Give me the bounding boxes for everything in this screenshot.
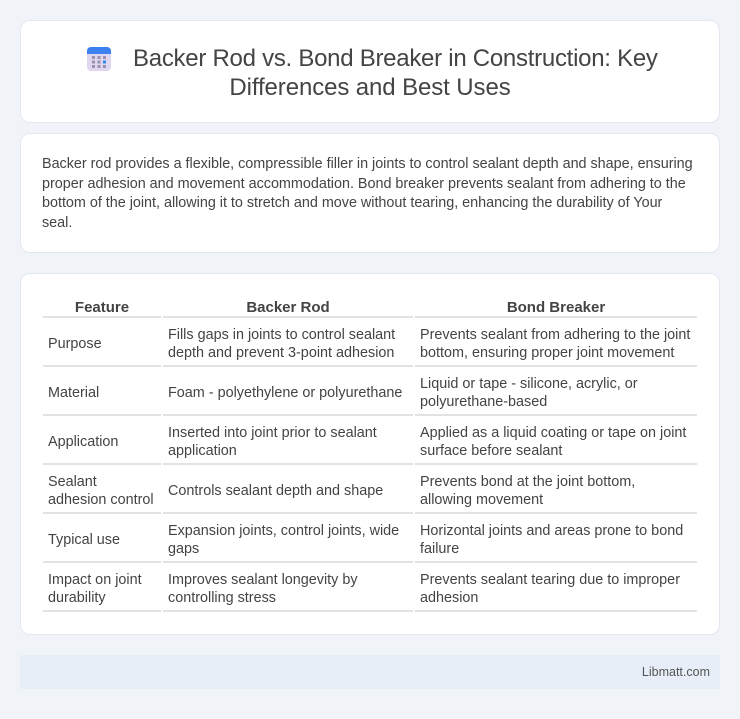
text block: introduction: bottom of the joint, allowing it to stretch and move without tearing, enhancing the durability of Your [42, 195, 662, 211]
comparison table: durability [48, 590, 106, 606]
text block: introduction: Backer rod provides a flexible, compressible filler in joints to control sealant depth and shape, ensuring [42, 156, 693, 172]
comparison table: Prevents sealant tearing due to improper [420, 572, 680, 588]
panel: introduction [20, 133, 720, 253]
comparison table: gaps [168, 540, 199, 556]
comparison table: bottom, ensuring proper joint movement [420, 344, 674, 360]
comparison table: Foam - polyethylene or polyurethane [168, 384, 402, 400]
comparison table: Sealant [48, 474, 97, 490]
comparison table: Controls sealant depth and shape [168, 482, 383, 498]
text block: introduction [42, 156, 693, 230]
comparison table: Improves sealant longevity by [168, 572, 358, 588]
comparison table: Prevents bond at the joint bottom, [420, 474, 635, 490]
footer credit: Libmatt.com [642, 665, 710, 679]
panel: comparison table [20, 273, 720, 635]
comparison table: Application [48, 434, 118, 450]
comparison table: Expansion joints, control joints, wide [168, 522, 399, 538]
comparison table: Bond Breaker [507, 299, 605, 316]
comparison table: Fills gaps in joints to control sealant [168, 326, 395, 342]
comparison table: allowing movement [420, 492, 543, 508]
panel: title card [20, 20, 720, 123]
comparison table: Typical use [48, 532, 120, 548]
comparison table: Liquid or tape - silicone, acrylic, or [420, 376, 638, 392]
comparison table: Applied as a liquid coating or tape on joint [420, 424, 686, 440]
text block: introduction: seal. [42, 214, 72, 230]
title [133, 45, 658, 101]
comparison table: Prevents sealant from adhering to the joint [420, 326, 690, 342]
comparison table: controlling stress [168, 590, 276, 606]
comparison table: polyurethane-based [420, 394, 547, 410]
comparison table: adhesion [420, 590, 478, 606]
title: Differences and Best Uses [229, 74, 511, 101]
comparison table: Impact on joint [48, 572, 142, 588]
comparison table: application [168, 442, 237, 458]
title: Backer Rod vs. Bond Breaker in Construction: Key [133, 45, 658, 72]
comparison table [43, 299, 697, 612]
comparison table: Purpose [48, 336, 102, 352]
comparison table: Backer Rod [246, 299, 330, 316]
comparison table: Material [48, 384, 99, 400]
comparison table: Horizontal joints and areas prone to bond [420, 522, 683, 538]
footer [20, 655, 720, 689]
comparison table: adhesion control [48, 492, 154, 508]
comparison table: depth and prevent 3-point adhesion [168, 344, 394, 360]
comparison table: failure [420, 540, 459, 556]
icon: calendar [87, 47, 111, 71]
comparison table: Inserted into joint prior to sealant [168, 424, 377, 440]
text block: introduction: proper adhesion and movement accommodation. Bond breaker prevents sealant from adhering to the [42, 176, 686, 192]
comparison table: Feature [75, 299, 129, 316]
comparison table: surface before sealant [420, 442, 562, 458]
